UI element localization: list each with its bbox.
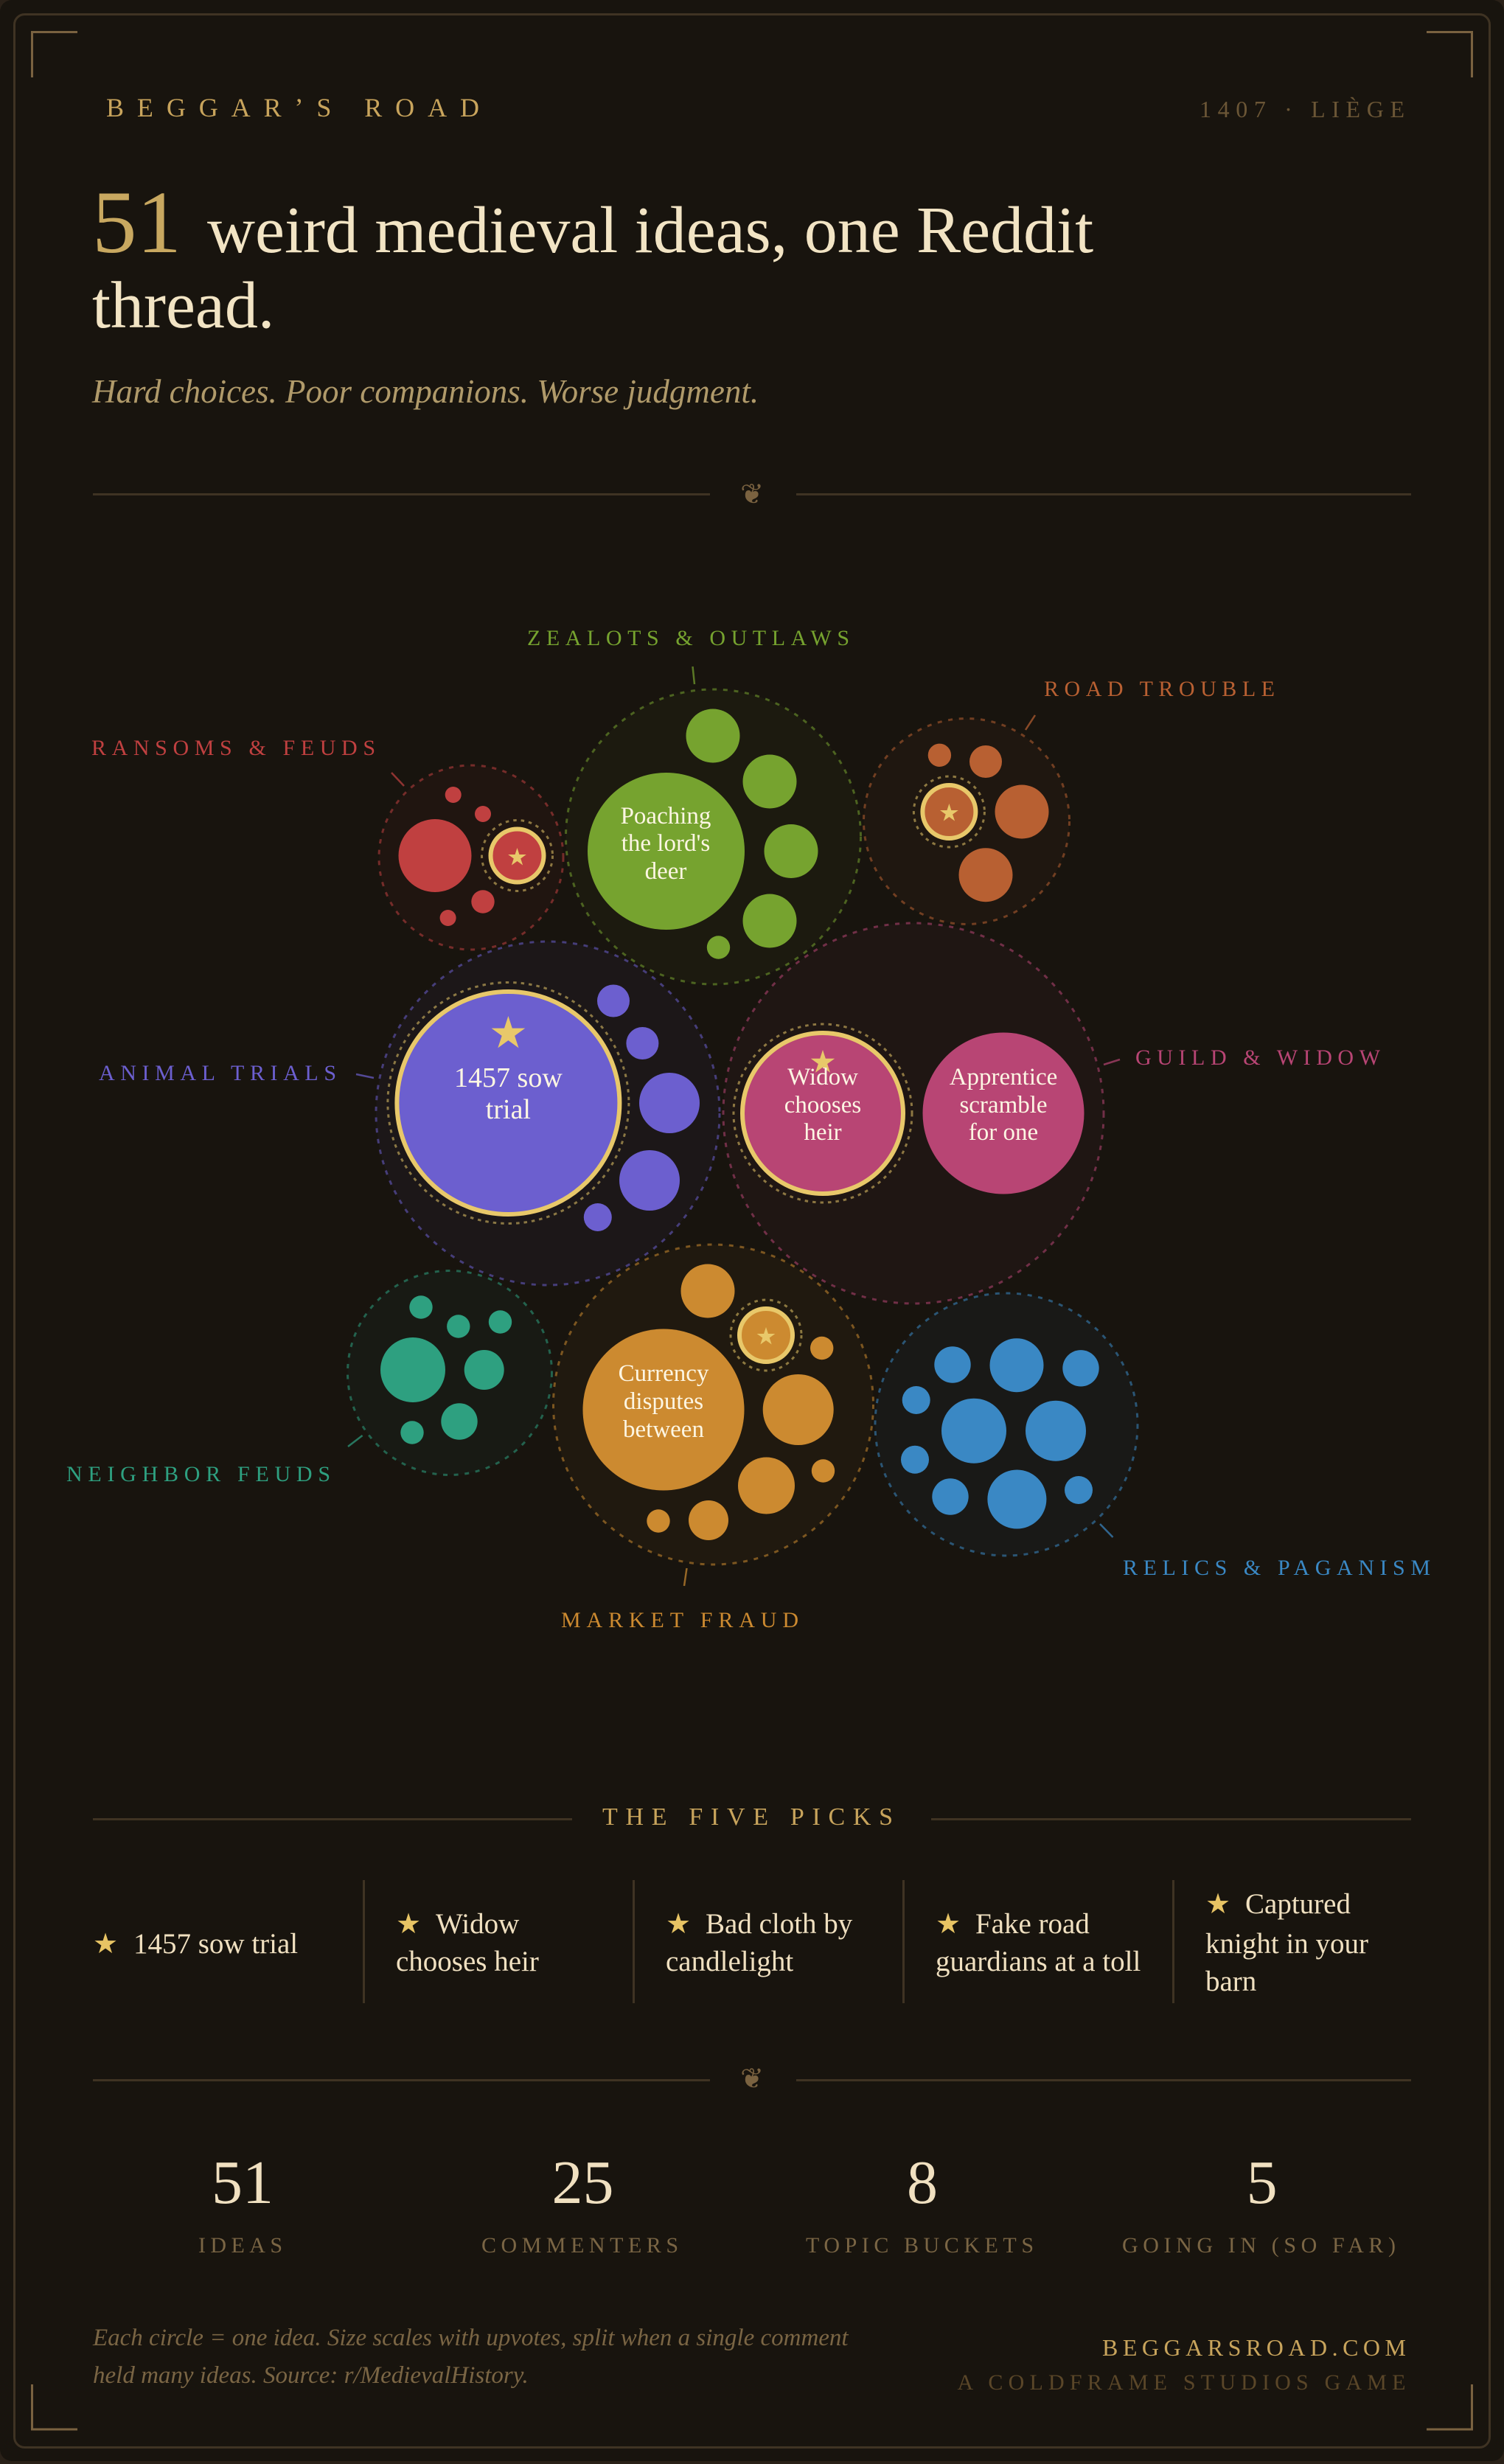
cluster: neighbor feuds	[348, 1271, 551, 1475]
label: road trouble: ROAD TROUBLE	[1044, 677, 1275, 701]
subtitle: Hard choices. Poor companions. Worse judgment.	[91, 373, 759, 410]
pick 5: Captured	[1245, 1888, 1351, 1920]
label: neighbor feuds	[66, 1435, 363, 1486]
cluster: animal trials: trial	[486, 1094, 531, 1125]
cluster: guild and widow	[723, 923, 1104, 1304]
label: animal trials: ANIMAL TRIALS	[99, 1061, 336, 1085]
title: thread.	[92, 269, 274, 342]
pick 4: Fake road	[975, 1908, 1090, 1940]
cluster: guild and widow: for one	[969, 1119, 1038, 1146]
cluster: ransoms and feuds	[379, 765, 563, 950]
label: road trouble	[1026, 677, 1275, 730]
pick 4: ★	[936, 1907, 961, 1940]
stat: going in: GOING IN (SO FAR)	[1122, 2233, 1396, 2258]
pick 4: guardians at a toll	[936, 1946, 1141, 1977]
heading: the five picks: THE FIVE PICKS	[602, 1803, 893, 1831]
cluster: guild and widow: scramble	[959, 1092, 1048, 1118]
stat: ideas	[198, 2148, 282, 2258]
pick 1: ★	[93, 1927, 118, 1960]
stat: topic buckets: 8	[907, 2148, 938, 2217]
pick 3: Bad cloth by	[706, 1908, 853, 1940]
cluster: zealots and outlaws	[566, 689, 861, 984]
cluster: zealots and outlaws: Poaching	[621, 803, 711, 829]
cluster: road trouble	[864, 718, 1069, 925]
cluster: market fraud: between	[623, 1416, 704, 1443]
label: market fraud	[561, 1568, 798, 1632]
cluster: guild and widow: chooses	[784, 1092, 861, 1118]
pick 2: chooses heir	[396, 1946, 539, 1977]
label: ransoms and feuds: RANSOMS & FEUDS	[91, 736, 375, 760]
cluster: animal trials	[376, 942, 720, 1285]
label: relics and paganism	[1100, 1524, 1430, 1580]
five picks list	[93, 1880, 1368, 2003]
cluster: zealots and outlaws: the lord's	[622, 830, 710, 857]
cluster: zealots and outlaws: deer	[645, 858, 686, 885]
stat: topic buckets	[806, 2148, 1034, 2258]
pick 3: ★	[666, 1907, 691, 1940]
pick 5: barn	[1205, 1966, 1256, 1997]
pick 5: ★	[1205, 1887, 1230, 1920]
label: zealots and outlaws: ZEALOTS & OUTLAWS	[527, 626, 849, 650]
footer site: BEGGARSROAD.COM	[1102, 2334, 1406, 2361]
stat: going in: 5	[1247, 2148, 1278, 2217]
stat: ideas: IDEAS	[198, 2233, 282, 2258]
footer credit: A COLDFRAME STUDIOS GAME	[957, 2370, 1405, 2395]
label: neighbor feuds: NEIGHBOR FEUDS	[66, 1462, 330, 1486]
pick 5: knight in your	[1205, 1928, 1368, 1960]
pick 3: candlelight	[666, 1946, 793, 1977]
divider with ornament	[93, 2062, 1411, 2095]
cluster: animal trials: 1457 sow	[454, 1062, 563, 1093]
stat: commenters: COMMENTERS	[481, 2233, 678, 2258]
pick 2: Widow	[436, 1908, 519, 1940]
title: 51	[92, 173, 181, 272]
bubble chart	[348, 689, 1138, 1565]
method note: held many ideas. Source: r/MedievalHistory.	[93, 2362, 529, 2389]
divider with ornament: ❦	[740, 478, 764, 510]
stat: commenters: 25	[551, 2148, 613, 2217]
cluster: relics and paganism	[875, 1293, 1138, 1556]
method note: Each circle = one idea. Size scales with upvotes, split when a single comment	[92, 2325, 849, 2351]
stat: commenters	[481, 2148, 678, 2258]
pick 2: ★	[396, 1907, 421, 1940]
brand name: BEGGAR’S ROAD	[106, 93, 479, 122]
stat: going in	[1122, 2148, 1396, 2258]
cluster: market fraud: disputes	[624, 1388, 703, 1415]
title: weird medieval ideas, one Reddit	[207, 194, 1093, 267]
stat: topic buckets: TOPIC BUCKETS	[806, 2233, 1034, 2258]
label: market fraud: MARKET FRAUD	[561, 1608, 798, 1632]
place and date: 1407 · LIÈGE	[1200, 96, 1404, 122]
divider with ornament	[93, 478, 1411, 510]
divider with ornament: ❦	[740, 2062, 764, 2095]
heading: the five picks	[93, 1803, 1411, 1831]
cluster: guild and widow: Apprentice	[950, 1064, 1057, 1090]
label: guild and widow: GUILD & WIDOW	[1135, 1045, 1381, 1070]
cluster: market fraud: Currency	[619, 1360, 709, 1387]
cluster: guild and widow: Widow	[787, 1064, 858, 1090]
stat: ideas: 51	[212, 2148, 274, 2217]
cluster: guild and widow: heir	[804, 1119, 842, 1146]
cluster: market fraud	[553, 1245, 873, 1565]
label: ransoms and feuds	[91, 736, 404, 786]
label: relics and paganism: RELICS & PAGANISM	[1123, 1556, 1430, 1580]
pick 1: 1457 sow trial	[133, 1928, 298, 1960]
